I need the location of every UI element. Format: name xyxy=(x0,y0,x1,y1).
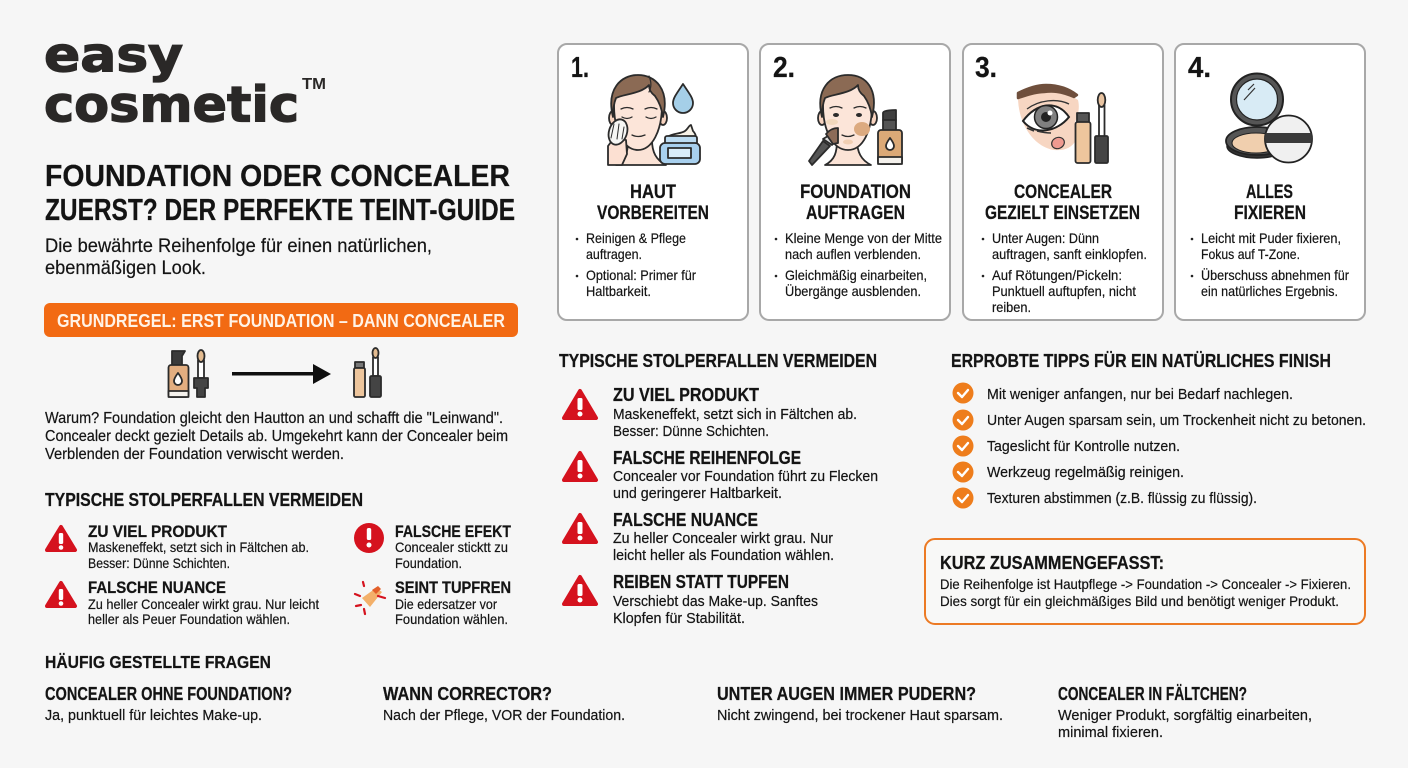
pitfall: reiben statt tupfen: Verschiebt das Make-up. Sanftes xyxy=(613,593,818,610)
pitfall: seint tupfren: SEINT TUPFREN xyxy=(395,578,511,597)
pitfall: falsche efekt: Foundation. xyxy=(395,555,462,571)
tip list: Texturen abstimmen (z.B. flüssig zu flüssig). xyxy=(987,490,1257,507)
pitfall: falsche reihenfolge: FALSCHE REIHENFOLGE xyxy=(613,448,801,468)
pitfall: seint tupfren: Foundation wählen. xyxy=(395,611,508,627)
card 1: Haut vorbereiten: 1. xyxy=(571,52,589,84)
card 4: Alles fixieren: Überschuss abnehmen für xyxy=(1201,266,1349,283)
icon: foundation and dropper xyxy=(168,350,208,397)
logo: easy cosmetic: easy xyxy=(44,28,183,84)
text: why: Warum? Foundation gleicht den Hautton an und schafft die "Leinwand". xyxy=(45,410,503,427)
card 3: Concealer gezielt einsetzen: Punktuell auftupfen, nicht xyxy=(992,283,1136,299)
icon: concealer tube and wand xyxy=(354,348,381,397)
pitfall: zu viel produkt left: ZU VIEL PRODUKT xyxy=(88,522,228,541)
heading: tips: ERPROBTE TIPPS FÜR EIN NATÜRLICHES FINISH xyxy=(951,351,1331,371)
faq 4 xyxy=(1058,684,1312,741)
pitfall: seint tupfren: Die edersatzer vor xyxy=(395,596,497,612)
tip list: Tageslicht für Kontrolle nutzen. xyxy=(987,438,1180,455)
faq 2: WANN CORRECTOR? xyxy=(383,684,552,704)
faq 4: Weniger Produkt, sorgfältig einarbeiten, xyxy=(1058,707,1312,724)
card 3: Concealer gezielt einsetzen: 3. xyxy=(975,52,997,84)
faq 2 xyxy=(383,684,625,724)
card 3: Concealer gezielt einsetzen: CONCEALER xyxy=(1014,182,1112,203)
pitfall: falsche nuance left: FALSCHE NUANCE xyxy=(88,578,226,597)
text: why: Verblenden der Foundation verwischt werden. xyxy=(45,446,344,463)
callout: summary: KURZ ZUSAMMENGEFASST: xyxy=(940,553,1164,573)
card 1: Haut vorbereiten: Haltbarkeit. xyxy=(586,283,651,299)
tip list xyxy=(952,382,1366,508)
card 3: Concealer gezielt einsetzen: auftragen, sanft einklopfen. xyxy=(992,246,1147,262)
pitfall: zu viel produkt: ZU VIEL PRODUKT xyxy=(613,385,759,405)
title: FOUNDATION ODER CONCEALER xyxy=(45,158,510,193)
card 4: Alles fixieren xyxy=(1175,44,1365,320)
text: why xyxy=(45,410,508,463)
pitfall: zu viel produkt left xyxy=(47,522,309,571)
pitfall: falsche nuance: Zu heller Concealer wirkt grau. Nur xyxy=(613,530,833,547)
card 2: Foundation auftragen: AUFTRAGEN xyxy=(806,203,905,224)
pitfall: falsche nuance left: Zu heller Concealer wirkt grau. Nur leicht xyxy=(88,596,319,612)
icon: eye, concealer tube and wand xyxy=(1018,85,1108,163)
card 4: Alles fixieren: Leicht mit Puder fixieren, xyxy=(1201,230,1341,246)
pitfall: falsche efekt xyxy=(354,522,512,571)
card 2: Foundation auftragen: 2. xyxy=(773,52,795,84)
pitfall: zu viel produkt xyxy=(564,385,857,440)
card 1: Haut vorbereiten: VORBEREITEN xyxy=(597,203,709,224)
heading: pitfalls left: TYPISCHE STOLPERFALLEN VERMEIDEN xyxy=(45,490,363,510)
banner: Grundregel xyxy=(44,303,518,337)
arrow xyxy=(232,364,331,384)
card 4: Alles fixieren: FIXIEREN xyxy=(1234,203,1306,224)
faq 3: Nicht zwingend, bei trockener Haut sparsam. xyxy=(717,707,1003,724)
faq 1: Ja, punktuell für leichtes Make-up. xyxy=(45,707,262,724)
pitfall: seint tupfren xyxy=(355,578,511,627)
faq 1 xyxy=(45,684,292,724)
icon: face with pad, drop and jar xyxy=(605,75,700,165)
logo: easy cosmetic xyxy=(44,28,326,134)
card 2: Foundation auftragen: Kleine Menge von der Mitte xyxy=(785,230,942,246)
title xyxy=(45,158,515,227)
pitfall: falsche nuance: leicht heller als Foundation wählen. xyxy=(613,547,834,564)
card 3: Concealer gezielt einsetzen xyxy=(963,44,1163,320)
faq 1: CONCEALER OHNE FOUNDATION? xyxy=(45,684,292,704)
pitfall: zu viel produkt left: Besser: Dünne Schichten. xyxy=(88,555,230,571)
tip list: Unter Augen sparsam sein, um Trockenheit nicht zu betonen. xyxy=(987,412,1366,429)
card 2: Foundation auftragen: Übergänge ausblenden. xyxy=(785,282,921,299)
text: why: Concealer deckt gezielt Details ab. Umgekehrt kann der Concealer beim xyxy=(45,428,508,445)
pitfall: zu viel produkt: Besser: Dünne Schichten. xyxy=(613,423,769,440)
title: ZUERST? DER PERFEKTE TEINT-GUIDE xyxy=(45,192,515,227)
card 3: Concealer gezielt einsetzen: Auf Rötungen/Pickeln: xyxy=(992,267,1122,283)
faq 3: UNTER AUGEN IMMER PUDERN? xyxy=(717,684,976,704)
card 2: Foundation auftragen xyxy=(760,44,950,320)
pitfall: falsche reihenfolge xyxy=(564,448,878,502)
pitfall: zu viel produkt: Maskeneffekt, setzt sich in Fältchen ab. xyxy=(613,406,857,423)
card 1: Haut vorbereiten: auftragen. xyxy=(586,246,642,262)
card 2: Foundation auftragen: FOUNDATION xyxy=(800,182,911,203)
card 1: Haut vorbereiten: HAUT xyxy=(630,182,676,203)
heading: FAQ: HÄUFIG GESTELLTE FRAGEN xyxy=(45,652,271,672)
pitfall: falsche efekt: Concealer sticktt zu xyxy=(395,539,508,555)
card 4: Alles fixieren: ALLES xyxy=(1246,182,1293,203)
subtitle xyxy=(45,235,432,279)
pitfall: falsche nuance xyxy=(564,510,834,564)
banner: Grundregel: GRUNDREGEL: ERST FOUNDATION – DANN CONCEALER xyxy=(57,311,505,331)
callout: summary: Dies sorgt für ein gleichmäßiges Bild und benötigt weniger Produkt. xyxy=(940,593,1339,609)
pitfall: falsche reihenfolge: und geringerer Haltbarkeit. xyxy=(613,485,782,502)
logo: easy cosmetic: cosmetic xyxy=(44,76,299,134)
icon: powder compact and puff xyxy=(1226,74,1312,162)
faq 2: Nach der Pflege, VOR der Foundation. xyxy=(383,707,625,724)
pitfall: reiben statt tupfen: REIBEN STATT TUPFEN xyxy=(613,572,789,592)
card 4: Alles fixieren: 4. xyxy=(1188,52,1211,84)
pitfall: falsche nuance left: heller als Peuer Foundation wählen. xyxy=(88,611,290,627)
subtitle: ebenmäßigen Look. xyxy=(45,257,206,279)
tip list: Mit weniger anfangen, nur bei Bedarf nachlegen. xyxy=(987,386,1293,403)
logo: easy cosmetic: TM xyxy=(302,76,326,93)
callout: summary xyxy=(925,539,1365,624)
pitfall: falsche efekt: FALSCHE EFEKT xyxy=(395,522,512,541)
card 4: Alles fixieren: ein natürliches Ergebnis. xyxy=(1201,283,1338,299)
pitfall: reiben statt tupfen: Klopfen für Stabilität. xyxy=(613,610,745,627)
heading: pitfalls middle: TYPISCHE STOLPERFALLEN VERMEIDEN xyxy=(559,351,877,371)
faq 3 xyxy=(717,684,1003,724)
card 2: Foundation auftragen: nach auflen verblenden. xyxy=(785,246,921,262)
card 2: Foundation auftragen: Gleichmäßig einarbeiten, xyxy=(785,267,927,283)
card 1: Haut vorbereiten: Optional: Primer für xyxy=(586,267,696,283)
pitfall: falsche nuance: FALSCHE NUANCE xyxy=(613,510,758,530)
tip list: Werkzeug regelmäßig reinigen. xyxy=(987,464,1184,481)
pitfall: falsche reihenfolge: Concealer vor Foundation führt zu Flecken xyxy=(613,468,878,485)
subtitle: Die bewährte Reihenfolge für einen natürlichen, xyxy=(45,235,432,257)
card 3: Concealer gezielt einsetzen: Unter Augen: Dünn xyxy=(992,230,1099,246)
card 1: Haut vorbereiten xyxy=(558,44,748,320)
pitfall: zu viel produkt left: Maskeneffekt, setzt sich in Fältchen ab. xyxy=(88,539,309,555)
callout: summary: Die Reihenfolge ist Hautpflege -> Foundation -> Concealer -> Fixieren. xyxy=(940,576,1351,592)
faq 4: minimal fixieren. xyxy=(1058,724,1163,741)
pitfall: falsche nuance left xyxy=(47,578,319,627)
card 3: Concealer gezielt einsetzen: reiben. xyxy=(992,299,1031,315)
icon: face, brush and foundation bottle xyxy=(809,75,902,165)
card 4: Alles fixieren: Fokus auf T-Zone. xyxy=(1201,246,1300,262)
card 3: Concealer gezielt einsetzen: GEZIELT EINSETZEN xyxy=(985,203,1140,224)
faq 4: CONCEALER IN FÄLTCHEN? xyxy=(1058,684,1247,704)
pitfall: reiben statt tupfen xyxy=(564,572,818,627)
card 1: Haut vorbereiten: Reinigen & Pflege xyxy=(586,230,686,246)
